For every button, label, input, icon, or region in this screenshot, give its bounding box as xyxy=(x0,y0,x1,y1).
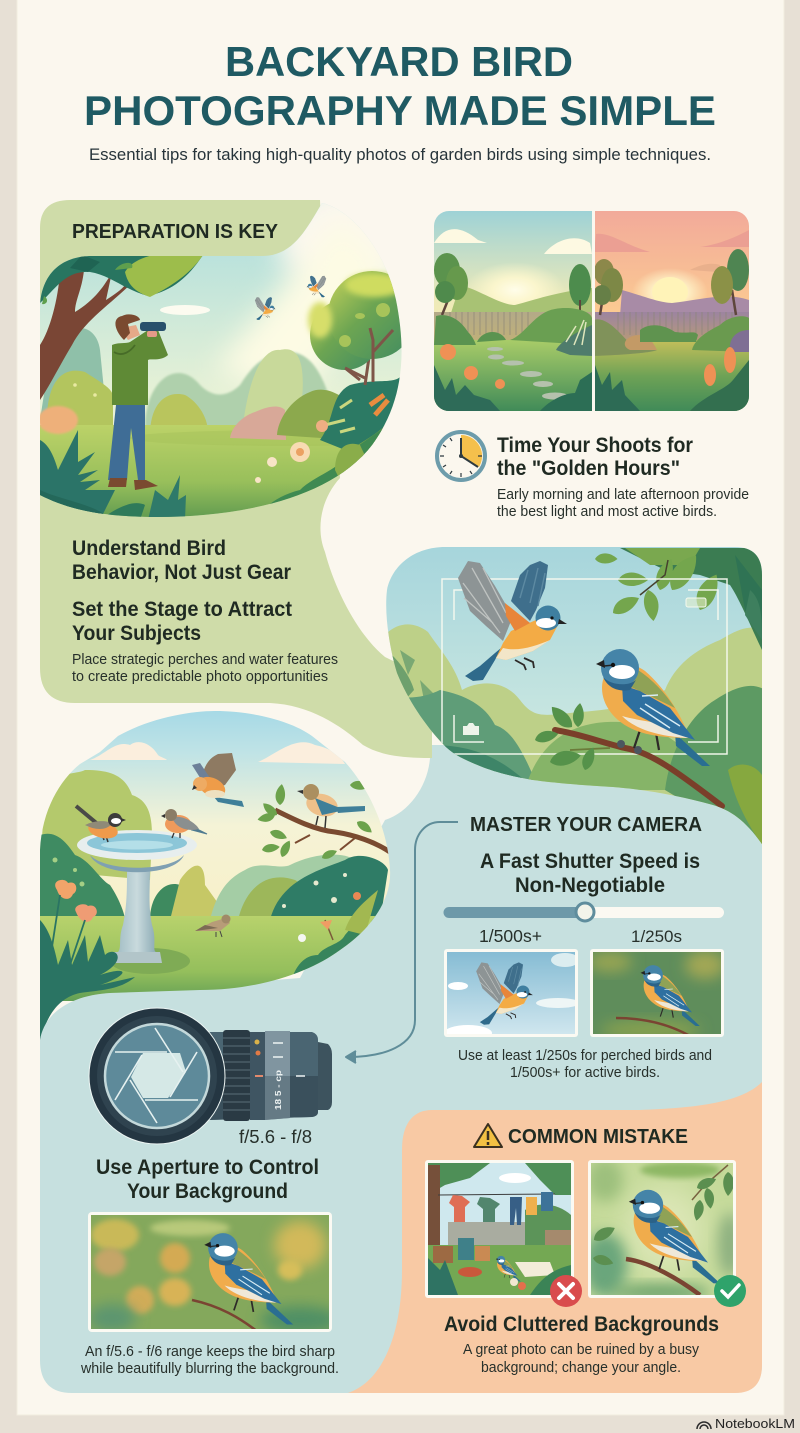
subtitle: Essential tips for taking high-quality photos of garden birds using simple techniques. xyxy=(89,145,711,164)
arrow: shutter to lens xyxy=(346,822,458,1063)
text: aperture guidance xyxy=(80,1344,339,1377)
icon: viewfinder camera xyxy=(463,723,479,735)
photo: clean background bird xyxy=(583,1158,742,1300)
text: golden hours: Early morning and late afternoon provide xyxy=(497,487,749,503)
left tree xyxy=(40,270,135,400)
icon: camera lens with aperture: 18 5 - cp xyxy=(273,1070,283,1110)
text: behaviour and attract subjects xyxy=(72,537,338,685)
foreground plants xyxy=(38,406,78,434)
heading: use aperture: Your Background xyxy=(127,1180,288,1203)
heading: fast shutter speed: A Fast Shutter Speed is xyxy=(480,850,700,873)
birds in sky xyxy=(255,297,276,320)
text: behaviour and attract subjects: Your Subjects xyxy=(72,622,201,645)
text: shutter guidance: 1/500s+ for active birds. xyxy=(510,1065,660,1081)
heading: preparation is key: PREPARATION IS KEY xyxy=(72,221,279,243)
heading: use aperture xyxy=(96,1156,319,1203)
panel: green preparation background xyxy=(40,200,432,758)
heading: fast shutter speed: Non-Negotiable xyxy=(515,874,665,897)
bird: on the lawn xyxy=(195,914,230,937)
slider: shutter speed xyxy=(444,903,724,921)
illustration: morning and evening garden split xyxy=(434,205,749,415)
photo: cluttered backyard xyxy=(425,1160,574,1298)
lawn xyxy=(38,916,393,1001)
hedges xyxy=(40,770,152,880)
labels: shutter speeds: 1/500s+ xyxy=(479,926,542,946)
panel: blue camera panel background xyxy=(40,745,762,1393)
title: BACKYARD BIRD xyxy=(225,38,573,85)
heading: use aperture: Use Aperture to Control xyxy=(96,1156,319,1179)
text: shutter guidance xyxy=(458,1048,712,1081)
stepping stones xyxy=(487,347,568,400)
text: avoid cluttered backgrounds: A great photo can be ruined by a busy xyxy=(463,1342,700,1358)
foreground plants and flowers xyxy=(434,365,500,411)
title xyxy=(84,38,716,134)
heading: common mistake: COMMON MISTAKE xyxy=(508,1126,688,1148)
photo: bokeh background bird xyxy=(88,1212,340,1334)
text: golden hours: the "Golden Hours" xyxy=(497,457,680,480)
text: aperture guidance: while beautifully blurring the background. xyxy=(80,1361,339,1377)
icon: warning triangle xyxy=(474,1124,502,1147)
text: golden hours: the best light and most active birds. xyxy=(497,504,717,520)
illustration: camera viewfinder with birds xyxy=(380,545,765,850)
icon: viewfinder battery xyxy=(686,598,706,607)
bushes xyxy=(434,315,476,345)
text: golden hours: Time Your Shoots for xyxy=(497,434,693,457)
foreground plants xyxy=(40,920,135,1045)
bird: flying in scene xyxy=(192,753,244,807)
overhead foliage xyxy=(620,548,762,650)
text: avoid cluttered backgrounds: Avoid Cluttered Backgrounds xyxy=(444,1313,719,1336)
text: behaviour and attract subjects: Understand Bird xyxy=(72,537,226,560)
text: golden hours xyxy=(497,434,749,520)
bird: tit on rim xyxy=(76,806,126,842)
badge: correct xyxy=(714,1275,746,1307)
heading: fast shutter speed xyxy=(480,850,700,897)
text: aperture guidance: An f/5.6 - f/6 range keeps the bird sharp xyxy=(85,1344,335,1360)
text: behaviour and attract subjects: Set the Stage to Attract xyxy=(72,598,292,621)
text: behaviour and attract subjects: to create predictable photo opportunities xyxy=(72,669,328,685)
heading: master your camera: MASTER YOUR CAMERA xyxy=(470,814,702,836)
birdbath xyxy=(77,830,197,963)
text: behaviour and attract subjects: Place strategic perches and water features xyxy=(72,652,338,668)
branch xyxy=(555,730,722,806)
text: avoid cluttered backgrounds: background; change your angle. xyxy=(481,1360,681,1376)
person xyxy=(108,405,145,480)
label: aperture range: f/5.6 - f/8 xyxy=(239,1127,312,1147)
right tree xyxy=(345,359,370,386)
icon: camera lens with aperture xyxy=(89,1008,332,1144)
viewfinder frame xyxy=(442,579,727,754)
text: shutter guidance: Use at least 1/250s for perched birds and xyxy=(458,1048,712,1064)
labels: shutter speeds xyxy=(479,926,682,946)
photo: perched bird xyxy=(588,949,725,1040)
panel: peach common mistake background xyxy=(348,1082,762,1393)
text: behaviour and attract subjects: Behavior, Not Just Gear xyxy=(72,561,291,584)
branch with leaves xyxy=(275,810,390,852)
illustration: birdwatcher in garden xyxy=(40,203,402,517)
garden trees xyxy=(442,290,736,315)
distant bushes xyxy=(380,624,765,850)
text: avoid cluttered backgrounds xyxy=(444,1313,719,1376)
icon: golden hour clock xyxy=(437,432,485,480)
bird: robin on rim xyxy=(161,809,207,838)
watermark: NotebookLM: NotebookLM xyxy=(715,1417,795,1431)
clouds xyxy=(90,742,167,760)
labels: shutter speeds: 1/250s xyxy=(631,927,682,946)
bird: perched on branch xyxy=(297,784,365,828)
title: PHOTOGRAPHY MADE SIMPLE xyxy=(84,87,716,134)
photo: bird in flight xyxy=(444,949,580,1041)
illustration: birds at birdbath xyxy=(38,710,393,1045)
badge: wrong xyxy=(550,1275,582,1307)
